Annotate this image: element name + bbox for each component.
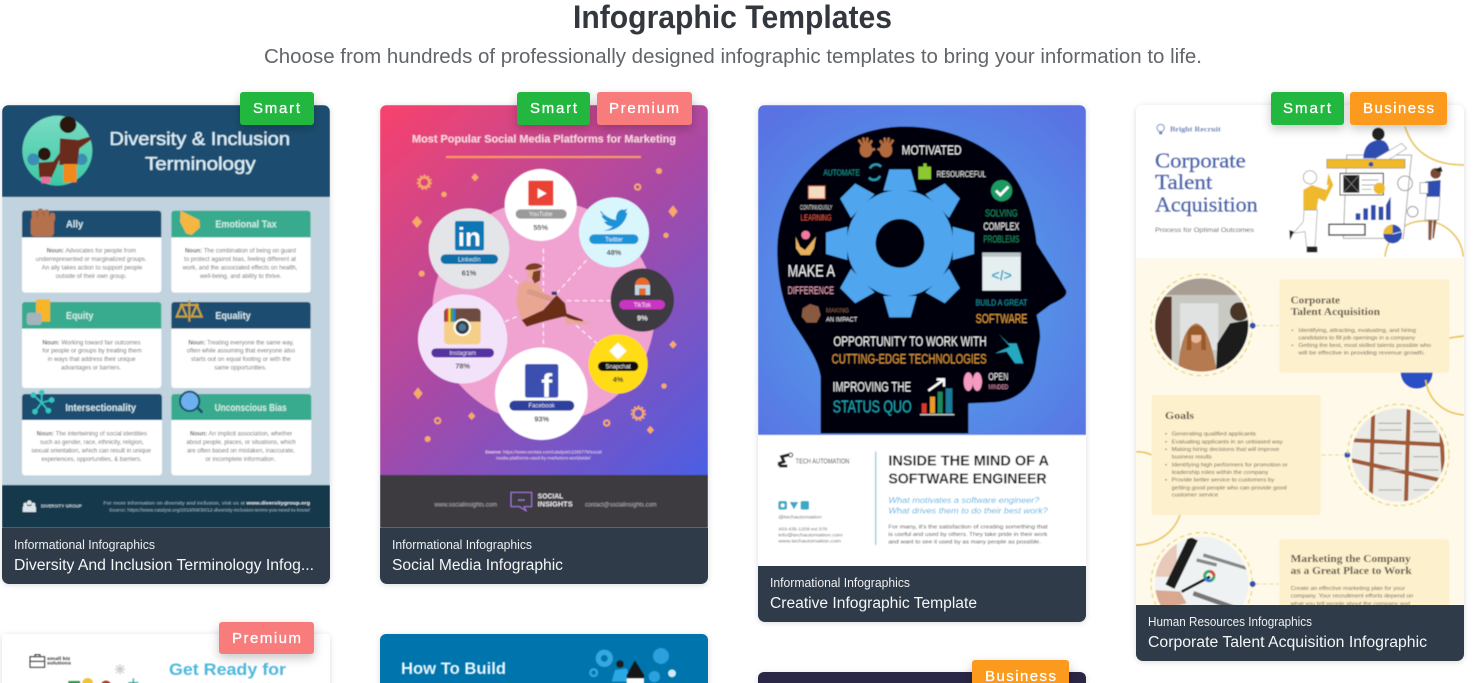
card: creative infographic [758,105,1086,622]
term box: unconscious bias: Unconscious Bias [215,403,287,414]
caption: social media card: Social Media Infographic [392,557,563,574]
head labels: IMPROVING THE [833,379,911,395]
card: holiday sales (row 2) [2,634,330,683]
text: equity definition: Noun: Working toward fair outcomes [42,339,141,346]
heading: get ready: Get Ready for [169,660,287,679]
illustration: team and charts [1289,127,1464,338]
head labels: CUTTING-EDGE TECHNOLOGIES [832,350,987,366]
bubble: instagram [418,294,507,384]
bubble: facebook [495,347,588,440]
bubble: tiktok [611,268,674,332]
heading: diversity title: Diversity & Inclusion [109,128,290,149]
illustration: head silhouette [777,127,1066,433]
text: equality definition: starts out on equal footing or with the [191,356,291,363]
head labels: MAKING [826,307,849,314]
section: goals: • [1165,478,1167,484]
term box: emotional tax: work, and the associated effects on health, [182,265,298,272]
panel: software engineer text [758,434,1086,545]
head labels: AUTOMATE [823,168,860,178]
card: social media [380,105,708,584]
badge: business, card 4: Business [1363,100,1434,117]
term box: unconscious bias: about people, places, or situations, which [186,439,296,446]
term box: intersectionality: such as gender, race, ethnicity, religion, [40,439,144,446]
section: corporate talent acquisition: candidates to fill job openings in a company [1298,336,1415,342]
term box: ally: Noun: Advocates for people from [47,248,136,255]
head labels: PROBLEMS [983,234,1020,245]
caption: creative card [758,566,1086,622]
text: tagline: Process for Optimal Outcomes [1155,227,1255,234]
caption: corporate card: Corporate Talent Acquisition Infographic [1148,634,1427,651]
text: equality definition [187,339,295,371]
section: goals [1136,395,1449,545]
section: goals: Identifying high performers for promotion or [1172,462,1288,468]
term box: equity [22,299,161,388]
badge: smart, card 1 [240,92,314,125]
footer: social insights: INSIGHTS [538,500,573,509]
head labels: RESOURCEFUL [937,169,986,179]
contact details: 403-435-1209 ext 576 [778,526,828,531]
chart backdrop: pink blob [432,200,655,423]
section: goals: Evaluating applicants in an unbiased way [1172,439,1283,445]
logo: small biz solutions: small biz [47,656,71,661]
section: corporate talent acquisition: Corporate [1291,295,1340,306]
text: questions: What motivates a software engineer? [888,495,1040,505]
footer: diversity group: Source: https://www.catalyst.org/2019/08/30/12-diversity-inclusion-terms-you-need-to-know/ [109,508,311,513]
term box: emotional tax: Noun: The combination of being on guard [185,248,296,255]
caption: diversity card [2,528,330,584]
head icons [796,139,1023,415]
text: answer: and want to see it used by as many people as possible. [888,539,1041,545]
logo: bright recruit [1157,124,1221,134]
caption: diversity card: Diversity And Inclusion Terminology Infog... [14,557,314,574]
section: marketing the company: as a Great Place to Work [1291,566,1412,577]
footer: social insights: contact@socialinsights.com [585,503,657,509]
illustration: person with phone [516,263,591,327]
term box: ally: An ally takes action to support people [42,265,143,272]
term box: unconscious bias: or incomplete information. [205,456,276,463]
term box: emotional tax: well-being, and ability to thrive. [199,273,282,280]
bubble: youtube: YouTube [529,212,553,218]
heading: corporate talent acquisition: Talent [1155,172,1213,194]
text: source note: Source: https://www.venitas.com/catalyst/c2295779/social [485,450,602,455]
text: questions: What drives them to do their best work? [888,506,1048,516]
head labels: STATUS QUO [833,397,912,417]
bubble: snapchat: 4% [613,375,624,384]
heading: inside the mind: INSIDE THE MIND OF A [888,454,1049,470]
section: goals: • [1165,439,1167,445]
head labels: MAKE A [788,262,836,281]
caption: corporate card [1136,605,1464,661]
section: goals: • [1165,432,1167,438]
section: goals: Provide better service to customers by [1172,478,1275,484]
text: equity definition: in ways that address their unique [48,356,136,363]
caption: corporate card: Human Resources Infographics [1148,615,1312,629]
head labels [788,142,1028,417]
bubble: instagram: Instagram [449,351,476,357]
connectors: dashed spokes [505,247,612,348]
head labels: MOTIVATED [902,142,962,157]
section: marketing the company [1151,533,1449,634]
term box: emotional tax [171,211,311,293]
logo: tech automation [779,453,849,466]
caption: social media card [380,528,708,584]
bubble: twitter: 48% [607,248,622,257]
head labels: MINDED [988,384,1008,391]
thumbnail: talent acquisition infographic [1136,105,1464,634]
icons: holiday items [68,664,138,683]
text: answer [888,525,1048,545]
section: corporate talent acquisition: Getting the best, most skilled talents possible who [1298,343,1431,349]
term box: intersectionality: Intersectionality [65,403,136,414]
card: corporate talent acquisition [1136,105,1464,661]
caption: diversity card: Informational Infographics [14,538,155,552]
heading: diversity title: Terminology [145,153,256,174]
section: corporate talent acquisition: • [1291,328,1293,334]
head labels: SOLVING [985,209,1018,220]
footer: diversity group: For more information on diversity and inclusion, visit us at www.diversitygroup.org [103,500,310,506]
text: equality definition: Noun: Treating everyone the same way, [188,339,294,346]
text: answer: For many, it's the satisfaction of creating something that [888,525,1048,531]
section: marketing the company: Create an effective marketing plan for your [1291,586,1405,592]
thumbnail: software engineer infographic [758,105,1086,566]
contact details: info@techautomation.com [778,532,843,537]
badge: smart, card 1: Smart [253,100,301,117]
section: goals: business results [1172,455,1212,461]
term box: intersectionality: experiences, opportunities, & barriers. [41,456,142,463]
heading: corporate talent acquisition [1155,150,1258,217]
caption: creative card: Creative Infographic Template [770,595,977,612]
heading: corporate talent acquisition: Corporate [1155,150,1246,172]
title: Infographic Templates [573,0,892,35]
bubble: instagram: 78% [455,362,470,371]
thumbnail: social media infographic [380,105,708,528]
bubble: tiktok: TikTok [634,303,651,309]
footer: social insights [433,492,657,511]
term box: unconscious bias: Noun: An implicit association, whether [190,431,292,438]
section: goals: • [1165,447,1167,453]
badge: smart, card 2 [517,92,590,125]
thumbnail: diversity infographic [2,105,330,528]
decoration: blue half circle [1401,373,1433,389]
bubble: twitter [579,197,649,267]
logo: tech automation: TECH AUTOMATION [796,456,849,465]
section: goals: customer service [1172,493,1218,499]
term box: equality [171,300,311,388]
decoration: sparkles [412,168,678,442]
heading: social media title: Most Popular Social Media Platforms for Marketing [412,134,676,146]
contact details: @techautomation [778,514,822,519]
bubble: facebook: 93% [534,414,549,423]
icon: parent and child circle [22,116,92,186]
footer: social insights: ••• [518,497,525,504]
term box: intersectionality: sexual orientation, which can result in unique [31,447,151,454]
text: equity definition [42,339,142,371]
bubble: linkedin [429,208,509,289]
text: answer: is useful and used by others. They take pride in their work [888,532,1048,538]
badge: premium, row 2 [219,622,314,654]
text: equality definition: same opportunities. [214,364,267,371]
badge: smart, card 4 [1271,92,1344,125]
bubble: twitter: Twitter [605,237,623,243]
term box: ally: Ally [66,219,84,230]
section: marketing the company: what you tell people about the company and [1290,601,1410,607]
card: diversity and inclusion [2,105,330,584]
heading: inside the mind: SOFTWARE ENGINEER [888,471,1047,487]
term box: ally: outside of their own group. [56,273,127,280]
bubble: tiktok: 9% [637,313,648,322]
head labels: LEARNING [801,213,832,223]
badge: premium, card 2 [597,92,692,125]
section: corporate talent acquisition [1151,274,1449,376]
section: corporate talent acquisition: Identifying, attracting, evaluating, and hiring [1298,328,1416,334]
illustration: rocket and gears [590,648,676,683]
text: source note: media-platforms-used-by-marketers-worldwide/ [496,455,591,460]
text: equity definition: advantages or barriers. [61,364,121,371]
section: goals: Generating qualified applicants [1172,432,1256,438]
term box: emotional tax: Emotional Tax [215,219,277,230]
term box: ally [22,208,161,293]
card: how to build (row 2) [380,634,708,683]
bubble: youtube [505,169,577,241]
bubble: linkedin: in [458,222,481,252]
head labels: CONTINUOUSLY [800,205,832,211]
caption: creative card: Informational Infographics [770,576,910,590]
heading: inside the mind [888,454,1049,487]
subtitle: Choose from hundreds of professionally designed infographic templates to bring your information to life. [264,46,1202,68]
head labels: OPEN [988,372,1008,383]
section: marketing the company: Marketing the Company [1291,554,1412,565]
illustration: gear [826,169,974,317]
card: dark template (row 2) [758,672,1086,683]
head icons: </> [992,267,1012,283]
heading: diversity title [109,128,290,174]
footer: social insights: SOCIAL [538,492,564,501]
badge: smart, card 4: Smart [1283,100,1332,117]
logo: small biz solutions [30,655,71,667]
bubble: snapchat [588,334,648,394]
badge: premium, row 2: Premium [232,630,301,647]
head labels: COMPLEX [983,221,1019,233]
section: corporate talent acquisition: • [1291,343,1293,349]
head labels: DIFFERENCE [788,285,834,297]
term box: unconscious bias: are often based on mistaken, inaccurate, [187,447,295,454]
footer: diversity group: DIVERSITY GROUP [41,504,82,509]
bubble: youtube: 55% [533,223,548,232]
heading: how to build: How To Build [401,659,506,678]
text: source note [485,450,602,460]
section: corporate talent acquisition: Talent Acquisition [1291,307,1380,318]
section: marketing the company: company. Your recruitment efforts depend on [1291,594,1413,600]
head labels: BUILD A GREAT [976,298,1028,308]
section: goals: Making hiring decisions that will improve [1172,447,1279,453]
term box: intersectionality [22,391,162,475]
head labels: AN IMPACT [826,316,857,323]
footer: diversity group [23,500,311,513]
term box: emotional tax: to protect against bias, feeling different at [184,256,296,263]
section: goals: • [1165,462,1167,468]
contact details: www.techautomation.com [778,538,841,543]
head labels: SOFTWARE [976,311,1027,326]
bubble: facebook: f [541,368,553,405]
contact details [778,501,843,543]
head labels: OPPORTUNITY TO WORK WITH [833,333,987,349]
text: questions [888,495,1048,516]
section: goals: Goals [1165,411,1194,422]
badge: business, card 4 [1350,92,1447,125]
bubble: linkedin: 61% [462,268,477,277]
badge: smart, card 2: Smart [530,100,578,117]
term box: intersectionality: Noun: The intertwining of social identities [37,431,147,438]
caption: social media card: Informational Infographics [392,538,532,552]
bubble: snapchat: Snapchat [605,364,631,370]
bubble: facebook: Facebook [529,404,555,410]
term box: equality: Equality [215,311,251,322]
badge: premium, card 2: Premium [609,100,679,117]
text: equality definition: often while assuming that everyone also [187,348,295,355]
bubble: linkedin: LinkedIn [458,257,481,263]
heading: corporate talent acquisition: Acquisition [1155,195,1258,217]
logo: small biz solutions: solutions [47,661,71,666]
section: corporate talent acquisition: will be effective in providing revenue growth. [1297,351,1425,357]
text: equity definition: for people or groups by treating them [42,348,142,355]
term box: ally: underrepresented or marginalized groups. [36,256,147,263]
section: goals: leadership roles within the company [1172,470,1269,476]
section: goals: getting good people who can provide good [1172,485,1287,491]
footer: social insights: www.socialinsights.com [433,503,497,509]
logo: bright recruit: Bright Recruit [1170,125,1221,134]
term box: equity: Equity [66,311,94,322]
badge: business, row 2 [972,660,1069,683]
term box: unconscious bias [171,392,311,475]
